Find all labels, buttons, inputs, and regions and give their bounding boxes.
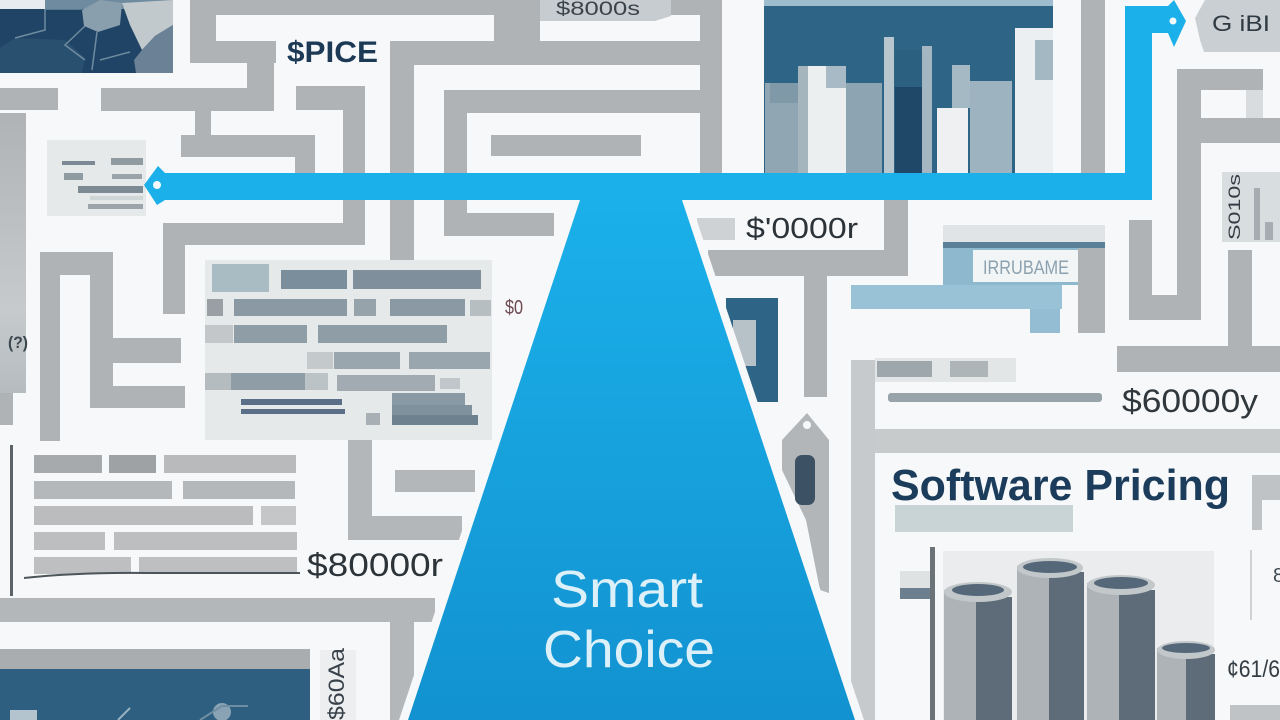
side label box: S010s: [1225, 174, 1244, 240]
small red glyph label: $0: [505, 297, 523, 319]
title: software pricing: Software Pricing: [891, 461, 1230, 510]
funnel label: smart choice: Choice: [543, 621, 715, 679]
side label box: [1222, 172, 1280, 242]
price tag: top right: [1195, 0, 1280, 52]
bar list: lower left: [10, 445, 300, 596]
price tag: top right: G iBI: [1212, 11, 1270, 36]
price tag icon: [782, 413, 829, 593]
subtitle placeholder: [895, 505, 1073, 532]
small data panel: [47, 140, 146, 216]
small legend swatch: [900, 571, 930, 599]
left edge icon: (?): [8, 333, 28, 352]
map thumbnail: [0, 0, 173, 73]
chart window: bottom left: [0, 649, 310, 720]
funnel label: smart choice: Smart: [551, 561, 704, 619]
price label: 80000: $80000r: [307, 547, 443, 583]
rotated price label: bottom: $60Aa: [324, 647, 349, 720]
rotated price label: bottom: [320, 647, 356, 720]
white border of decision funnel: [399, 200, 864, 720]
price label panel: 50000: [697, 213, 858, 245]
price panel: 60000: [875, 358, 1258, 419]
maze walls: bottom left: [0, 438, 475, 720]
price label: spice: $PICE: [287, 36, 378, 69]
price label panel: 50000: $'0000r: [746, 213, 858, 245]
insurance card: IRRUBAME: [983, 258, 1069, 279]
insurance card: [851, 225, 1105, 333]
data table panel: [205, 260, 492, 440]
funnel label: smart choice: [543, 561, 715, 679]
maze walls: left and top: [0, 0, 722, 441]
decision funnel: [408, 200, 855, 720]
cylinder bar chart: [930, 547, 1215, 720]
dark document panel: [726, 298, 778, 402]
price panel: 60000: $60000y: [1122, 383, 1258, 419]
blue path arrow: [144, 0, 1186, 205]
price tag: top centre: [540, 0, 671, 21]
maze walls: right: [708, 0, 1280, 720]
chart window: top right: [764, 0, 1053, 173]
